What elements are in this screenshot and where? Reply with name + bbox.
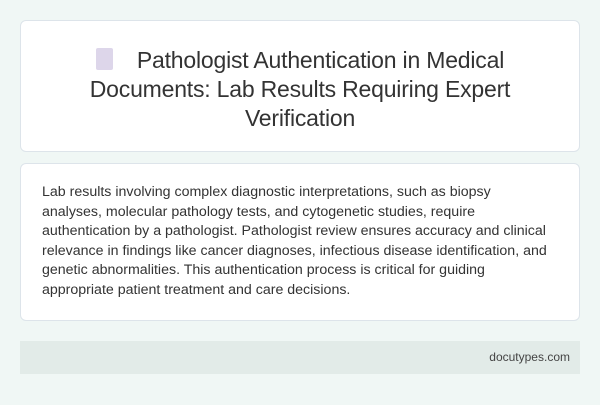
footer bar: [20, 341, 580, 374]
body text: relevance in findings like cancer diagnoses, infectious disease identification, and: [42, 242, 547, 258]
body text: authentication by a pathologist. Pathologist review ensures accuracy and clinical: [42, 223, 546, 239]
body text: analyses, molecular pathology tests, and cytogenetic studies, require: [42, 204, 475, 220]
description card: [20, 163, 580, 321]
title card: [20, 20, 580, 152]
icon: document: [96, 48, 113, 70]
body text: genetic abnormalities. This authentication process is critical for guiding: [42, 262, 485, 278]
body text: Lab results involving complex diagnostic interpretations, such as biopsy: [42, 184, 491, 200]
body text: [42, 184, 547, 298]
body text: appropriate patient treatment and care decisions.: [42, 282, 350, 298]
footer text: docutypes.com: [489, 350, 570, 364]
title: Pathologist Authentication in Medical Documents: Lab Results Requiring Expert Verification: [90, 47, 510, 131]
